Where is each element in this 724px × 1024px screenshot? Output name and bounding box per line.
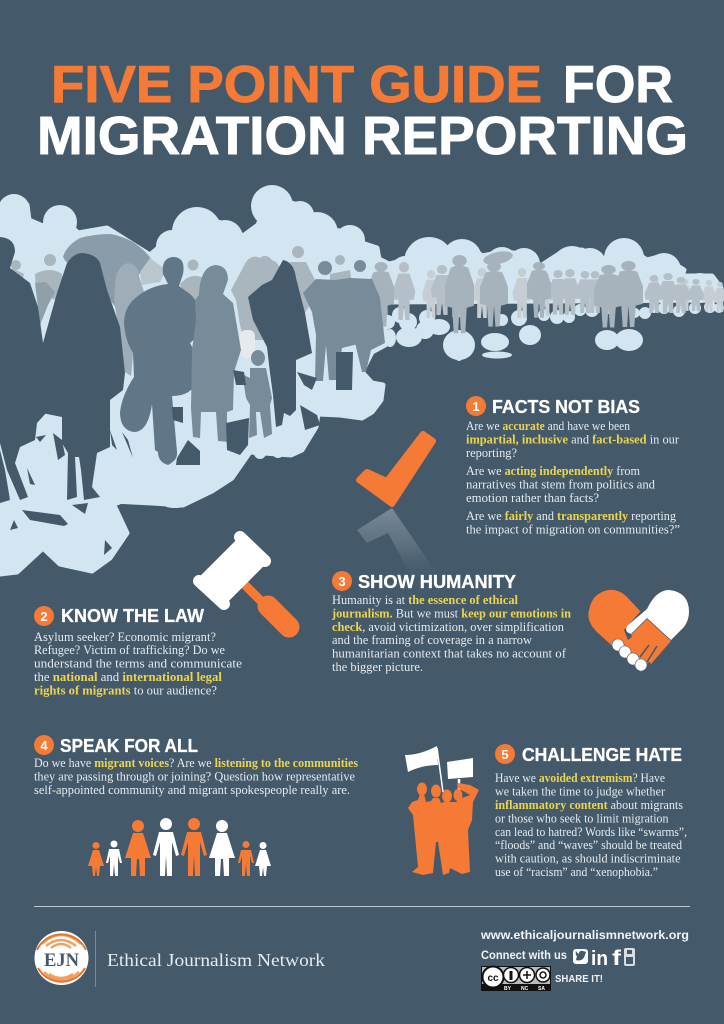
section 4: speak for all: Do we have migrant voices? Are we listening to the communities [34, 756, 358, 770]
logo: EJN: EJN [44, 950, 79, 971]
icon: check mark [357, 434, 438, 585]
umbrella [482, 249, 514, 267]
title: MIGRATION REPORTING [37, 106, 688, 166]
long-haired woman [42, 253, 125, 500]
section 1: facts not bias: impartial, inclusive and fact-based in our [466, 432, 680, 446]
title: FIVE POINT GUIDE [51, 56, 542, 114]
title [37, 56, 688, 166]
man with bag [120, 257, 199, 465]
trees and ground [0, 185, 724, 574]
creative commons badge: SA [538, 986, 545, 992]
section 3: show humanity: check, avoid victimization, over simplification [332, 620, 564, 634]
section 5: challenge hate: “floods” and “waves” should be treated [495, 838, 683, 852]
icon: family of people [88, 818, 271, 876]
creative commons badge: NC [521, 986, 529, 992]
title: FOR [563, 56, 673, 114]
section 2: know the law: understand the terms and communicate [34, 656, 243, 670]
section 1: facts not bias: emotion rather than facts? [466, 491, 599, 505]
section 2: know the law: 2 [40, 609, 48, 624]
social icons [573, 947, 635, 970]
section 5: challenge hate: we taken the time to judge whether [495, 784, 666, 798]
icon: handshake heart [588, 590, 689, 672]
section 5: challenge hate: CHALLENGE HATE [522, 745, 682, 765]
umbrella figure behind [63, 234, 152, 320]
section 3: show humanity: Humanity is at the essence of ethical [332, 593, 519, 607]
section 5: challenge hate: or those who seek to limit migration [495, 812, 668, 826]
section 2: know the law: the national and international legal [34, 670, 223, 684]
section 5: challenge hate: with caution, as should indiscriminate [495, 852, 681, 866]
section 2: know the law [34, 606, 243, 698]
logo: EJN [34, 931, 88, 985]
section 3: show humanity: humanitarian context that takes no account of [332, 646, 567, 660]
creative commons badge [481, 966, 551, 992]
section 4: speak for all: self-appointed community and migrant spokespeople really are. [34, 783, 350, 797]
section 2: know the law: Asylum seeker? Economic migrant? [34, 630, 216, 644]
left figure [0, 237, 46, 500]
section 5: challenge hate [495, 744, 687, 879]
child [240, 350, 272, 438]
section 4: speak for all: 4 [40, 738, 48, 753]
right mid group [303, 260, 385, 381]
foreground dark figures [0, 237, 320, 555]
section 1: facts not bias: Are we accurate and have we been [466, 419, 630, 433]
section 5: challenge hate: use of “racism” and “xenophobia.” [495, 865, 658, 879]
section 3: show humanity: the bigger picture. [332, 660, 423, 674]
section 4: speak for all [34, 735, 358, 797]
connect with us: Connect with us [481, 950, 567, 962]
section 3: show humanity: 3 [338, 574, 346, 589]
illustration: crowd of migrants [0, 185, 724, 574]
check reflection [357, 508, 438, 585]
social icons: in [591, 948, 608, 970]
section 1: facts not bias: the impact of migration on communities?” [466, 522, 680, 536]
near puddle scallops [272, 446, 284, 458]
far background walkers [422, 268, 724, 318]
far crowd puddles [443, 330, 475, 360]
icon: protesters with flag and placard [405, 746, 479, 875]
section 1: facts not bias: FACTS NOT BIAS [492, 397, 640, 417]
section 5: challenge hate: can lead to hatred? Words like “swarms”, [495, 825, 687, 839]
section 3: show humanity [331, 571, 571, 674]
mid background figures [11, 246, 352, 340]
section 3: show humanity: SHOW HUMANITY [358, 572, 516, 592]
section 1: facts not bias: 1 [472, 399, 480, 414]
section 3: show humanity: and the framing of coverage in a narrow [332, 633, 532, 647]
social icons: f [612, 947, 622, 970]
organisation name: Ethical Journalism Network [107, 950, 325, 970]
section 5: challenge hate: 5 [501, 747, 509, 762]
section 2: know the law: rights of migrants to our audience? [34, 684, 217, 698]
section 2: know the law: Refugee? Victim of trafficking? Do we [34, 643, 225, 657]
section 4: speak for all: they are passing through or joining? Question how representative [34, 770, 355, 784]
centre woman [248, 260, 312, 427]
section 4: speak for all: SPEAK FOR ALL [60, 736, 198, 756]
creative commons badge: BY [504, 986, 512, 992]
section 2: know the law: KNOW THE LAW [61, 606, 204, 626]
section 5: challenge hate: Have we avoided extremism? Have [495, 771, 665, 785]
icon: gavel [199, 537, 289, 627]
section 3: show humanity: journalism. But we must keep our emotions in [331, 606, 571, 620]
section 1: facts not bias: narratives that stem from politics and [466, 478, 656, 492]
section 1: facts not bias: Are we fairly and transparently reporting [466, 509, 676, 523]
share it: SHARE IT! [555, 973, 603, 985]
section 1: facts not bias: reporting? [466, 446, 517, 460]
section 1: facts not bias: Are we acting independently from [466, 464, 640, 478]
creative commons badge: cc [487, 973, 499, 984]
section 5: challenge hate: inflammatory content about migrants [495, 798, 683, 812]
website url: www.ethicaljournalismnetwork.org [480, 928, 689, 942]
section 1: facts not bias [466, 396, 680, 536]
ground shadows [10, 370, 320, 555]
woman in coat [191, 265, 241, 442]
